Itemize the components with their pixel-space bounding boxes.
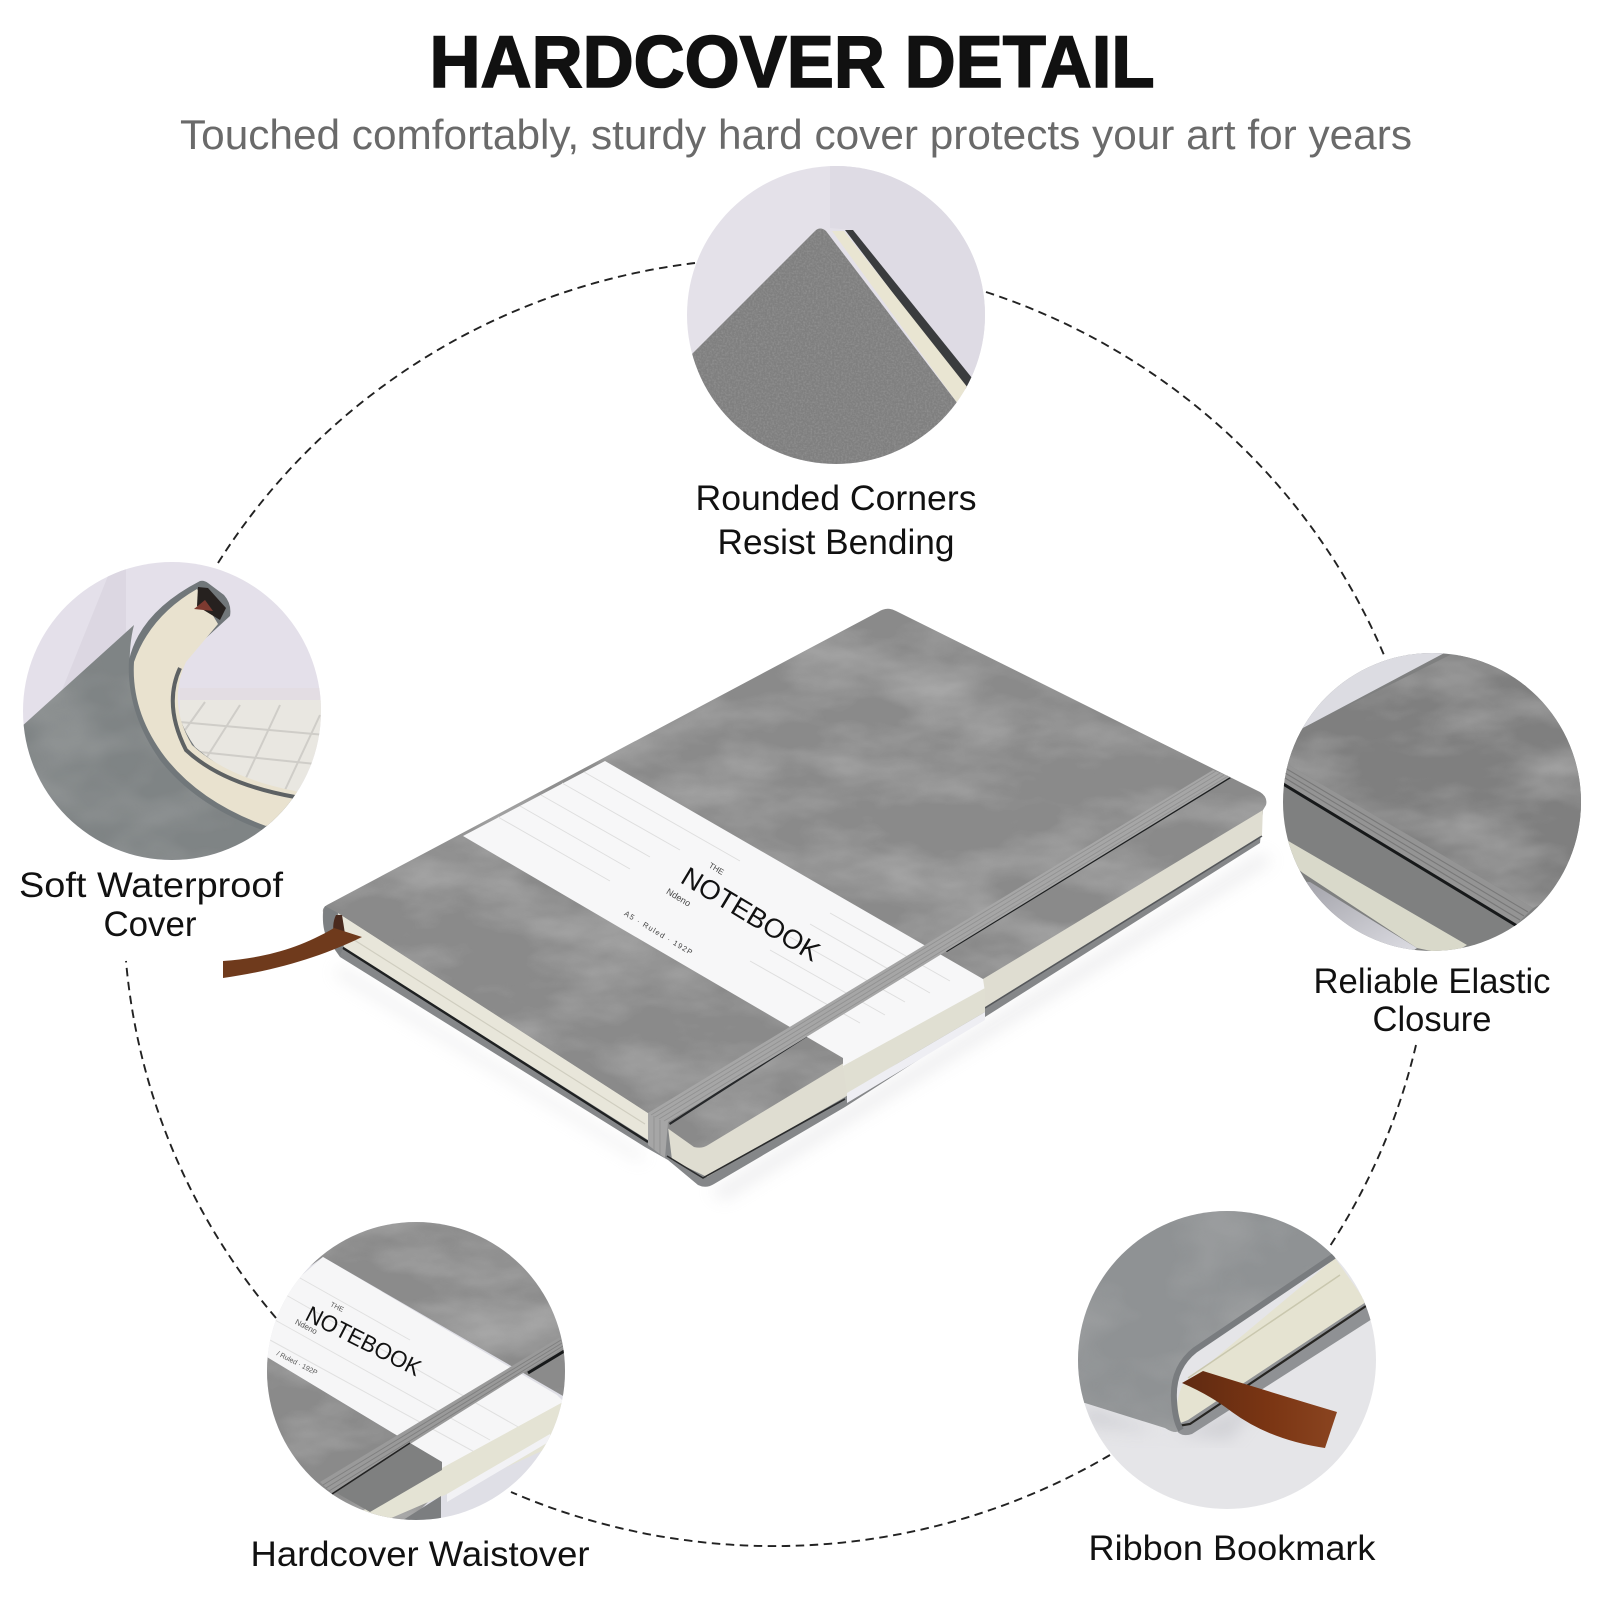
label: hardcover waistover: Hardcover Waistover xyxy=(250,1535,590,1574)
circle: hardcover waistover xyxy=(262,1218,572,1530)
lower cover piece xyxy=(335,1443,442,1512)
wrap over pages xyxy=(364,1403,562,1518)
dashed connector ring xyxy=(126,263,1416,1546)
cream pages and shadow xyxy=(1306,882,1417,950)
band text: THE xyxy=(329,1301,345,1314)
band text: THE xyxy=(707,861,725,877)
cover spine xyxy=(20,625,275,870)
notebook front cover with leather texture xyxy=(323,609,1266,1148)
front page block xyxy=(668,806,1263,1177)
notebook back cover xyxy=(323,810,1263,1187)
cover wrap xyxy=(1070,1205,1340,1432)
label: soft waterproof cover: Cover xyxy=(104,905,197,944)
elastic strap xyxy=(320,1337,563,1493)
elastic closure xyxy=(648,770,1231,1158)
left page block xyxy=(338,913,648,1140)
band text: NOTEBOOK xyxy=(302,1301,426,1381)
band text: A5 · Ruled · 192P xyxy=(623,909,694,957)
circle: soft waterproof cover xyxy=(20,560,325,870)
band text: / Ruled · 192P xyxy=(275,1350,318,1377)
band text: Ndeno xyxy=(294,1317,319,1336)
subtitle: Touched comfortably, sturdy hard cover protects your art for years xyxy=(180,111,1412,158)
ribbon xyxy=(1182,1371,1337,1448)
band text: Ndeno xyxy=(665,886,692,909)
label: rounded corners: Rounded Corners xyxy=(696,479,976,518)
circle: rounded corners xyxy=(687,166,985,464)
label: rounded corners: Resist Bending xyxy=(718,523,954,562)
circle: ribbon bookmark xyxy=(1070,1205,1380,1513)
central notebook xyxy=(223,609,1272,1200)
label: soft waterproof cover: Soft Waterproof xyxy=(19,866,283,905)
back cover edge xyxy=(1175,1298,1380,1435)
elastic strap xyxy=(1280,760,1533,924)
label: ribbon bookmark: Ribbon Bookmark xyxy=(1088,1529,1376,1568)
circle: elastic closure xyxy=(1280,650,1590,960)
page block xyxy=(1177,1258,1366,1424)
label: rounded corners xyxy=(696,479,976,562)
paper waist band xyxy=(463,761,985,1103)
label: soft waterproof cover xyxy=(19,866,283,944)
paper waist band xyxy=(262,1257,564,1470)
band text: NOTEBOOK xyxy=(676,861,825,967)
page block and cover edge xyxy=(129,580,294,830)
title: HARDCOVER DETAIL xyxy=(430,22,1154,103)
label: elastic closure: Reliable Elastic xyxy=(1314,962,1550,1001)
label: elastic closure: Closure xyxy=(1372,1000,1492,1039)
label: elastic closure xyxy=(1314,962,1550,1039)
ribbon bookmark xyxy=(223,906,362,978)
